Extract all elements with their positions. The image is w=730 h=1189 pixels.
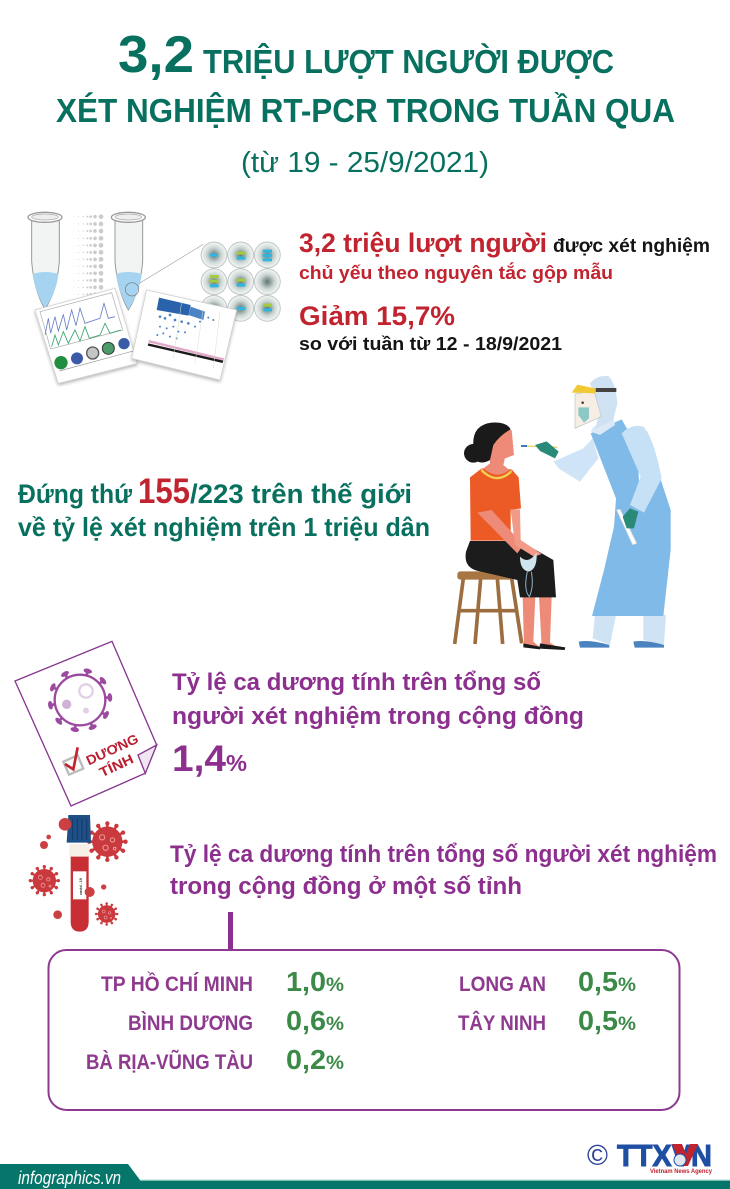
icon: positive result document bbox=[15, 641, 157, 806]
connector line bbox=[228, 912, 233, 950]
patient bbox=[464, 423, 565, 650]
right test tube bbox=[111, 212, 145, 310]
text block: world ranking bbox=[18, 472, 430, 542]
health worker bbox=[521, 376, 671, 648]
text block: community positivity rate bbox=[172, 669, 584, 779]
row: TP Hồ Chí Minh: 1,0 bbox=[286, 966, 326, 997]
row: Tây Ninh: 0,5 bbox=[578, 1005, 618, 1036]
text block: world ranking: về tỷ lệ xét nghiệm trên 1 triệu dân bbox=[18, 512, 430, 542]
text block: community positivity rate: 1,4 bbox=[172, 738, 226, 779]
logo: TTXVN: Vietnam News Agency bbox=[650, 1169, 713, 1175]
amplification chart card bbox=[35, 288, 137, 383]
text block: test volume: chủ yếu theo nguyên tắc gộp mẫu bbox=[299, 262, 613, 283]
folded mask bbox=[520, 553, 537, 597]
document sheet bbox=[15, 641, 157, 806]
row: Tây Ninh: % bbox=[618, 1014, 636, 1035]
zoom guide lines bbox=[139, 244, 203, 283]
text block: provincial heading bbox=[170, 841, 717, 900]
icon: RT-PCR laboratory tubes and charts bbox=[28, 212, 281, 383]
row: Bà Rịa-Vũng Tàu: % bbox=[326, 1053, 344, 1074]
row: TP Hồ Chí Minh bbox=[101, 966, 344, 997]
source label: infographics.vn bbox=[18, 1168, 121, 1188]
row: TP Hồ Chí Minh: TP HỒ CHÍ MINH bbox=[101, 972, 253, 996]
droplet scatter plot card bbox=[132, 290, 237, 380]
text block: test volume: so với tuần từ 12 - 18/9/2021 bbox=[299, 333, 562, 354]
text block: test volume: 3,2 triệu lượt người bbox=[299, 228, 547, 258]
logo: TTXVN bbox=[587, 1138, 713, 1175]
row: Bình Dương: 0,6 bbox=[286, 1005, 326, 1036]
row: Tây Ninh: TÂY NINH bbox=[458, 1011, 546, 1035]
logo: TTXVN: TTXVN bbox=[617, 1138, 712, 1173]
sample tube: covid - 19 bbox=[79, 878, 83, 895]
title: XÉT NGHIỆM RT-PCR TRONG TUẦN QUA bbox=[56, 92, 675, 129]
row: TP Hồ Chí Minh: % bbox=[326, 975, 344, 996]
row: Long An: % bbox=[618, 975, 636, 996]
panel: provincial rates bbox=[48, 950, 680, 1110]
title bbox=[56, 26, 675, 179]
row: Long An bbox=[459, 966, 636, 997]
dotted diffusion pattern bbox=[74, 214, 103, 297]
checkbox bbox=[63, 747, 83, 775]
row: Tây Ninh bbox=[458, 1005, 636, 1036]
row: Bình Dương: % bbox=[326, 1014, 344, 1035]
page fold bbox=[138, 745, 157, 773]
text block: world ranking: /223 trên thế giới bbox=[190, 479, 412, 509]
title: (từ 19 - 25/9/2021) bbox=[241, 147, 489, 179]
stamp label bbox=[84, 731, 148, 783]
left test tube bbox=[28, 212, 62, 309]
illustration: health worker taking a nasal swab bbox=[455, 376, 671, 650]
row: Bà Rịa-Vũng Tàu: 0,2 bbox=[286, 1044, 326, 1075]
icon: blood sample tube with viruses bbox=[29, 815, 128, 932]
row: Bình Dương bbox=[128, 1005, 344, 1036]
stamp label: TÍNH bbox=[97, 751, 136, 780]
logo: TTXVN: © bbox=[587, 1140, 608, 1172]
text block: test volume: được xét nghiệm bbox=[553, 236, 710, 257]
row: Bà Rịa-Vũng Tàu bbox=[86, 1044, 344, 1075]
wells grid bbox=[201, 242, 281, 322]
row: Bình Dương: BÌNH DƯƠNG bbox=[128, 1012, 253, 1035]
text block: world ranking: Đứng thứ bbox=[18, 479, 132, 509]
stool bbox=[455, 571, 522, 644]
stamp label: DƯƠNG bbox=[84, 731, 141, 768]
text block: community positivity rate: người xét nghiệm trong cộng đồng bbox=[172, 703, 584, 730]
title: TRIỆU LƯỢT NGƯỜI ĐƯỢC bbox=[203, 43, 614, 80]
text block: test volume: Giảm 15,7% bbox=[299, 301, 455, 331]
row: Long An: LONG AN bbox=[459, 973, 546, 996]
title: headline figure: 3,2 bbox=[118, 26, 194, 84]
text block: community positivity rate: Tỷ lệ ca dương tính trên tổng số bbox=[172, 669, 541, 696]
text block: provincial heading: trong cộng đồng ở một số tỉnh bbox=[170, 873, 522, 900]
virus particles bbox=[29, 821, 128, 926]
text block: test volume bbox=[299, 228, 710, 354]
text block: world ranking: 155 bbox=[138, 472, 190, 511]
row: Long An: 0,5 bbox=[578, 966, 618, 997]
footer band bbox=[0, 1164, 730, 1189]
virus icon bbox=[47, 668, 113, 733]
droplets bbox=[40, 818, 106, 919]
text block: community positivity rate: % bbox=[226, 750, 247, 776]
row: Bà Rịa-Vũng Tàu: BÀ RỊA-VŨNG TÀU bbox=[86, 1050, 253, 1074]
